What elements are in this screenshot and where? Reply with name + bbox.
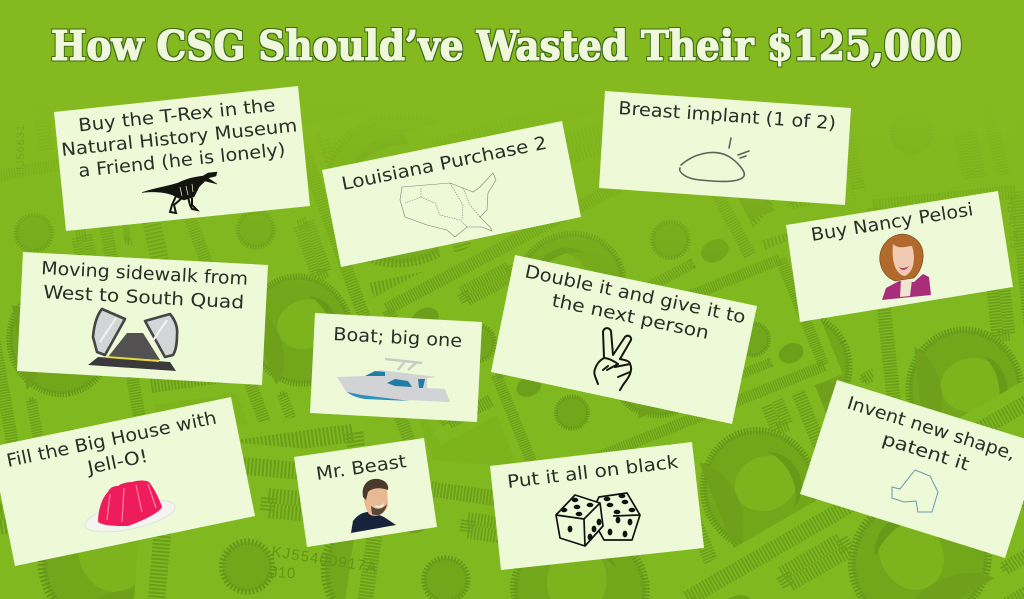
background: scattered dollar bills on green: KJ55400917A [270, 543, 378, 577]
text: Fill the Big House: Fill the Big House with [5, 408, 219, 472]
text: Fill the Big House: Jell-O! [85, 446, 150, 479]
card: Mr. Beast [294, 438, 437, 547]
icon: portrait [880, 234, 931, 300]
icon: USA map outline [400, 173, 496, 237]
text: T-Rex friend [60, 95, 298, 182]
text: T-Rex friend: a Friend (he is lonely) [77, 139, 286, 182]
text: Double it: Double it and give it to [523, 261, 747, 328]
icon: T-Rex skeleton [142, 172, 217, 213]
text: T-Rex friend: Buy the T-Rex in the [77, 95, 276, 136]
title: How CSG Should’ve Wasted Their $125,000 [51, 22, 962, 70]
card: Jell-O [0, 397, 255, 566]
text: Breast implant: Breast implant (1 of 2) [618, 98, 837, 134]
card: Boat [310, 313, 482, 422]
card: Double it [491, 255, 757, 424]
icon: invented shape [892, 470, 938, 512]
card: Breast implant [599, 91, 851, 205]
card: Louisiana Purchase [322, 121, 581, 267]
text: Moving sidewalk: Moving sidewalk from [41, 258, 249, 290]
background: scattered dollar bills on green: HJ56631 [15, 124, 27, 175]
icon: portrait [351, 479, 396, 533]
text: Moving sidewalk: West to South Quad [43, 282, 245, 314]
card: Nancy Pelosi [786, 191, 1013, 322]
icon: peace hand [594, 328, 631, 390]
text: Louisiana Purchase 2: Louisiana Purchase 2 [340, 133, 549, 195]
text: Put it all on black: Put it all on black [506, 452, 680, 493]
text: Boat; big one: Boat; big one [333, 324, 463, 352]
card: Put it all on black [490, 442, 704, 570]
text: Moving sidewalk [41, 258, 249, 314]
text: Double it: the next person [550, 290, 711, 344]
icon: yacht [337, 359, 450, 402]
text: Invent new shape: patent it [880, 429, 972, 476]
icon: dice [556, 493, 640, 546]
text: T-Rex friend: Natural History Museum [60, 115, 298, 161]
text: Invent new shape: Invent new shape, [845, 393, 1018, 465]
icon: moving walkway [88, 309, 177, 371]
card: T-Rex [54, 86, 310, 231]
card: Invent new shape [800, 380, 1024, 558]
card: Moving sidewalk [17, 252, 268, 385]
background: scattered dollar bills on green: HB40395 [1004, 196, 1020, 250]
text: Mr. Beast: Mr. Beast [315, 451, 408, 485]
icon: implant [680, 138, 749, 181]
background: scattered dollar bills on green: J10 [270, 564, 296, 582]
text: Buy Nancy Pelosi: Buy Nancy Pelosi [809, 199, 975, 246]
icon: jello on plate [82, 480, 178, 538]
